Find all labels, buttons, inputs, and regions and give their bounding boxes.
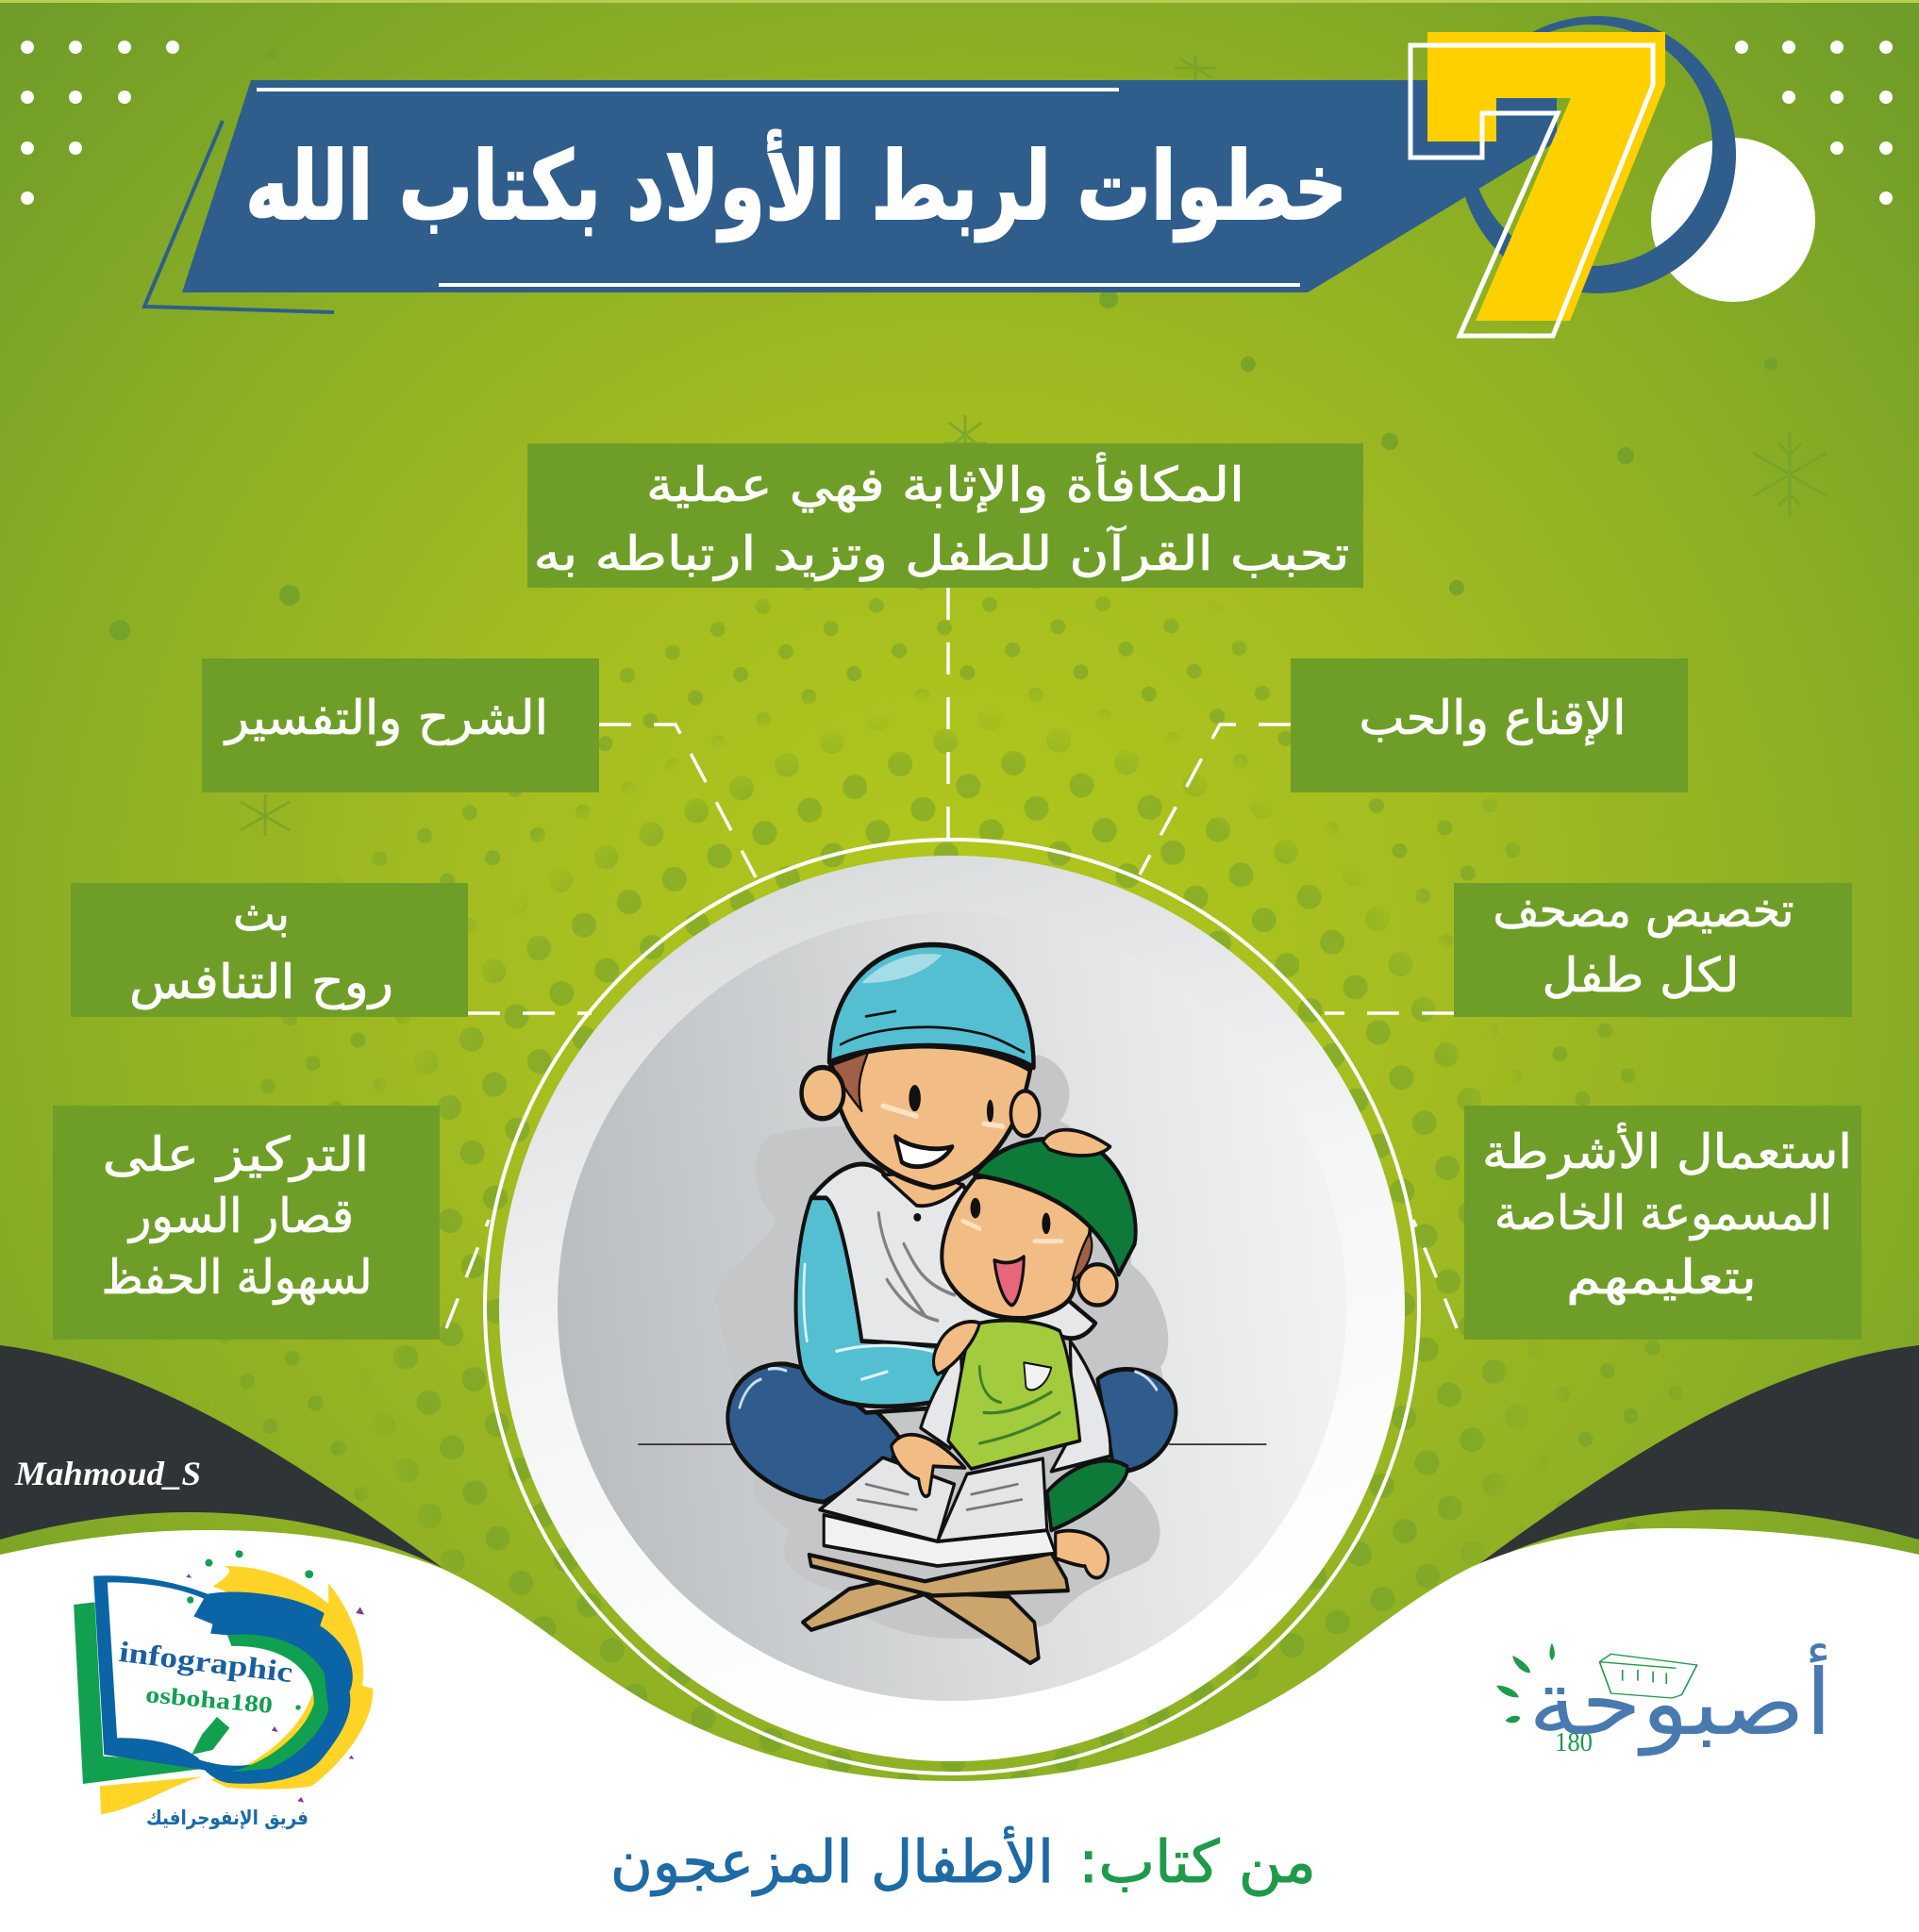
corner dots: top right: [1735, 41, 1893, 205]
mushaf text line 2: لكل طفل: [1542, 948, 1740, 1003]
snowflake decorations: [241, 57, 1827, 836]
persuasion text: الإقناع والحب: [1359, 691, 1627, 746]
step box: personal mushaf: [1454, 883, 1852, 1017]
dark wedge right: [1474, 1345, 1919, 1568]
logo icon artwork: [1496, 1643, 1697, 1723]
boy's cap: [975, 1139, 1136, 1274]
logo title: infographic: [117, 1635, 294, 1689]
floor line: [639, 1443, 1266, 1446]
man's eyes: [909, 1085, 993, 1123]
step box: competition: [71, 883, 468, 1017]
logo number: 180: [1555, 1728, 1593, 1757]
green inner wave: [227, 1635, 328, 1772]
green page: [74, 1602, 202, 1784]
book text lines: [858, 1484, 1022, 1509]
source line: [610, 1825, 1316, 1896]
yellow splash: [210, 1566, 373, 1790]
leg highlights: [740, 1369, 1157, 1407]
logo word: أصبوحة: [1528, 1643, 1832, 1757]
boy's green shirt: [948, 1321, 1080, 1469]
Osboha 180 logo: [1496, 1643, 1832, 1757]
logo artwork: [74, 1550, 373, 1814]
source label: من كتاب:: [1078, 1827, 1316, 1896]
banner top line: [257, 88, 1119, 92]
boy's hair: [1073, 1234, 1092, 1279]
man's smile: [895, 1137, 952, 1167]
banner shape: [182, 80, 1557, 292]
boy's right white sleeve: [1051, 1341, 1110, 1472]
shirt pocket: [1024, 1362, 1051, 1390]
man's neck: [883, 1173, 963, 1206]
confetti dots: [187, 1550, 313, 1710]
man's head: [830, 1046, 1030, 1188]
man's left leg: [727, 1364, 900, 1502]
cap creases: [841, 1011, 1024, 1052]
man's right ear: [1010, 1091, 1040, 1136]
soft shadows: [714, 1055, 1169, 1639]
boy's leg: [1047, 1460, 1127, 1530]
man's hand on boy's head: [1043, 1130, 1110, 1156]
boy's cheek marks: [963, 1221, 1061, 1241]
tapes text line 3: بتعليمهم: [1566, 1250, 1757, 1306]
open book icon: [1599, 1654, 1697, 1698]
book stand top: [809, 1553, 1068, 1595]
boy's mouth: [994, 1257, 1024, 1306]
central circle: [485, 840, 1419, 1774]
top text line 1: المكافأة والإثابة فهي عملية: [646, 452, 1244, 513]
cap highlight: [861, 954, 942, 983]
top text line 2: تحبب القرآن للطفل وتزيد ارتباطه به: [534, 525, 1349, 582]
mushaf text line 1: تخصيص مصحف: [1493, 883, 1794, 938]
dark wedge left: [0, 1345, 442, 1568]
grey disc: [558, 912, 1346, 1701]
competition text line 2: روح التنافس: [129, 955, 393, 1010]
boy's left white sleeve: [921, 1349, 963, 1448]
book stand left leg: [803, 1581, 925, 1630]
book title: الأطفال المزعجون: [610, 1825, 1054, 1896]
man's cap: [829, 944, 1034, 1068]
team name: فريق الإنفوجرافيك: [146, 1807, 309, 1829]
book left page: [820, 1457, 955, 1541]
yellow seven: [1427, 32, 1665, 321]
banner bracket: [144, 121, 334, 312]
blue wave: [193, 1591, 353, 1784]
sleeve folds: [804, 1264, 933, 1379]
boy's pointing hand: [892, 1435, 965, 1496]
number 7: [1410, 32, 1665, 336]
man's hair: [832, 1052, 868, 1111]
yellow back page: [100, 1776, 202, 1814]
book right page: [938, 1458, 1047, 1541]
step box: top: [527, 443, 1363, 588]
boy's ear: [1078, 1264, 1117, 1306]
book stand right leg: [908, 1584, 1039, 1663]
competition text line 1: بث: [233, 887, 290, 941]
book pages thickness: [824, 1515, 1056, 1566]
outer ring: [485, 840, 1419, 1774]
boy's foot: [1056, 1531, 1109, 1578]
infographic team logo: [74, 1550, 373, 1829]
white bottom wave: [0, 1528, 1919, 1932]
sun leaves: [1496, 1643, 1555, 1723]
pen nib: [192, 1717, 229, 1755]
dashed connectors: [446, 588, 1457, 1328]
robe folds: [878, 1213, 955, 1321]
tapes text line 2: المسموعة الخاصة: [1494, 1186, 1832, 1241]
step box: short surahs: [53, 1106, 440, 1340]
man's hand on shoulder: [934, 1322, 979, 1374]
robe button: [913, 1213, 921, 1222]
designer signature: Mahmoud_S: [14, 1455, 201, 1492]
halftone dots around the circle: [219, 588, 1681, 1780]
man's robe: [811, 1164, 1095, 1412]
title: خطوات لربط الأولاد بكتاب الله: [245, 129, 1347, 242]
decorative white circle: [1651, 138, 1815, 302]
corner dots: top left: [21, 41, 179, 205]
boy's eyes: [971, 1198, 1050, 1234]
surahs text line 3: لسهولة الحفظ: [102, 1250, 372, 1306]
tapes text line 1: استعمال الأشرطة: [1482, 1123, 1852, 1179]
man's left ear: [802, 1068, 843, 1119]
explanation text: الشرح والتفسير: [223, 691, 548, 746]
logo subtitle: osboha180: [144, 1682, 274, 1719]
scattered background dots: [109, 49, 1777, 641]
decorative blue crescent ring: [1459, 16, 1736, 293]
step box: audio tapes: [1464, 1106, 1861, 1340]
banner bottom line: [439, 283, 1300, 287]
man's cheek marks: [883, 1106, 1003, 1126]
surahs text line 1: التركيز على: [102, 1127, 370, 1182]
step box: explanation: [202, 658, 599, 792]
man's blue sleeve: [796, 1198, 946, 1407]
boy's head: [942, 1176, 1091, 1318]
step box: persuasion and love: [1291, 658, 1688, 792]
white plate: [499, 856, 1405, 1761]
man's right leg: [1097, 1369, 1176, 1472]
confetti triangles: [186, 1574, 364, 1803]
white seven outline: [1410, 45, 1653, 336]
blue open-book frame: [93, 1575, 209, 1771]
shirt folds: [979, 1367, 1060, 1443]
surahs text line 2: قصار السور: [126, 1189, 354, 1243]
title banner: [144, 80, 1557, 312]
illustration: father and son reading the Quran: [639, 944, 1266, 1663]
